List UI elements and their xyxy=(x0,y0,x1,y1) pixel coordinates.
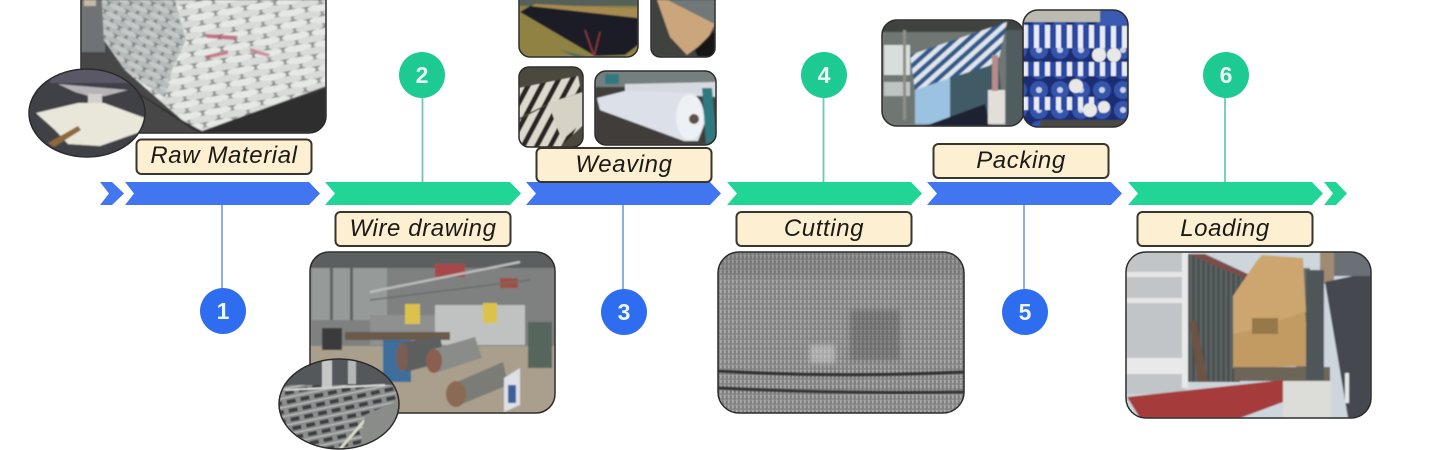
label: Raw Material xyxy=(136,140,312,174)
photo inset: spools xyxy=(279,359,399,449)
arrow: step 5 xyxy=(927,182,1122,205)
photo: white net roll xyxy=(595,71,716,145)
label: Loading: Loading xyxy=(1180,215,1270,242)
label: Loading xyxy=(1138,212,1312,246)
step 2 number badge: 2 xyxy=(416,62,428,88)
label: Wire drawing: Wire drawing xyxy=(349,215,497,242)
photo: striped net rolls xyxy=(519,67,583,147)
timeline arrow band xyxy=(100,182,1347,205)
step 1 number badge xyxy=(200,288,246,334)
label: Weaving: Weaving xyxy=(575,151,673,178)
photo: weaving tan net roll xyxy=(651,0,715,57)
arrow: step 4 xyxy=(727,182,922,205)
step 6 number badge: 6 xyxy=(1220,62,1232,88)
photo: weaving black net roll xyxy=(519,0,638,57)
step 5 number badge: 5 xyxy=(1019,299,1032,325)
photo: stacked raw material bags xyxy=(81,0,326,133)
arrow: step 2 xyxy=(325,182,521,205)
label: Raw Material: Raw Material xyxy=(150,142,298,169)
lead-in chevron xyxy=(100,182,124,205)
step 1 number badge: 1 xyxy=(217,298,230,324)
step 5 number badge xyxy=(1002,289,1048,335)
label: Packing xyxy=(934,144,1108,178)
arrow: step 6 xyxy=(1128,182,1323,205)
step 2 number badge xyxy=(399,52,445,98)
arrow: step 3 xyxy=(526,182,721,205)
photo: cut fabric texture xyxy=(718,252,964,413)
photo: blue and white rolls xyxy=(1023,10,1128,127)
lead-out chevron xyxy=(1324,182,1347,205)
photo inset: white granules xyxy=(29,69,145,157)
label: Packing: Packing xyxy=(976,147,1066,174)
step 6 number badge xyxy=(1203,52,1249,98)
connector lines xyxy=(222,97,1225,290)
step 3 number badge xyxy=(601,289,647,335)
arrow: step 1 xyxy=(125,182,320,205)
label: Weaving xyxy=(536,148,712,182)
step 4 number badge xyxy=(801,52,847,98)
step 3 number badge: 3 xyxy=(618,299,630,325)
step 4 number badge: 4 xyxy=(818,62,831,88)
photo: wire drawing machinery xyxy=(310,252,555,413)
label: Cutting xyxy=(736,212,912,246)
label: Cutting: Cutting xyxy=(784,215,864,242)
label: Wire drawing xyxy=(336,212,510,246)
photo: container loading xyxy=(1126,252,1371,418)
photo: striped net on loom xyxy=(882,20,1024,126)
